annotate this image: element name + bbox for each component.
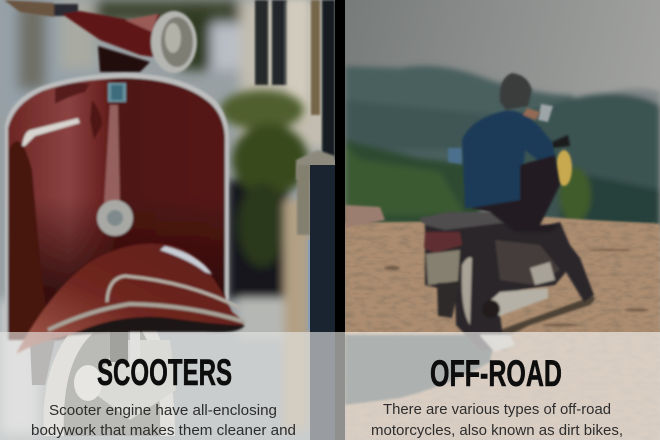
panel: off-road photo (345, 0, 660, 440)
translucent caption band: off-road (345, 332, 660, 440)
motorcycle (345, 104, 595, 405)
text block: off-road description: There are various types of off-road (383, 401, 611, 418)
translucent caption band: scooters (0, 332, 345, 440)
scooter handlebar and headlight (4, 0, 197, 73)
text block: scooters description: Scooter engine have all-enclosing (49, 402, 277, 419)
heading: off-road: OFF-ROAD (430, 353, 562, 394)
scooter wheel (30, 330, 176, 436)
text block: scooters description (31, 402, 296, 439)
scooter photo background (0, 0, 335, 440)
center divider (335, 0, 345, 440)
off-road landscape background (345, 0, 660, 440)
text block: off-road description: motorcycles, also known as dirt bikes, (371, 422, 623, 439)
rider (462, 73, 560, 232)
heading: scooters: SCOOTERS (97, 352, 232, 393)
text block: scooters description: bodywork that makes them cleaner and (31, 422, 296, 439)
scooter leg shield (5, 73, 229, 340)
scooter front fender (16, 243, 245, 354)
panel: scooters photo (0, 0, 335, 440)
text block: off-road description (371, 401, 623, 439)
